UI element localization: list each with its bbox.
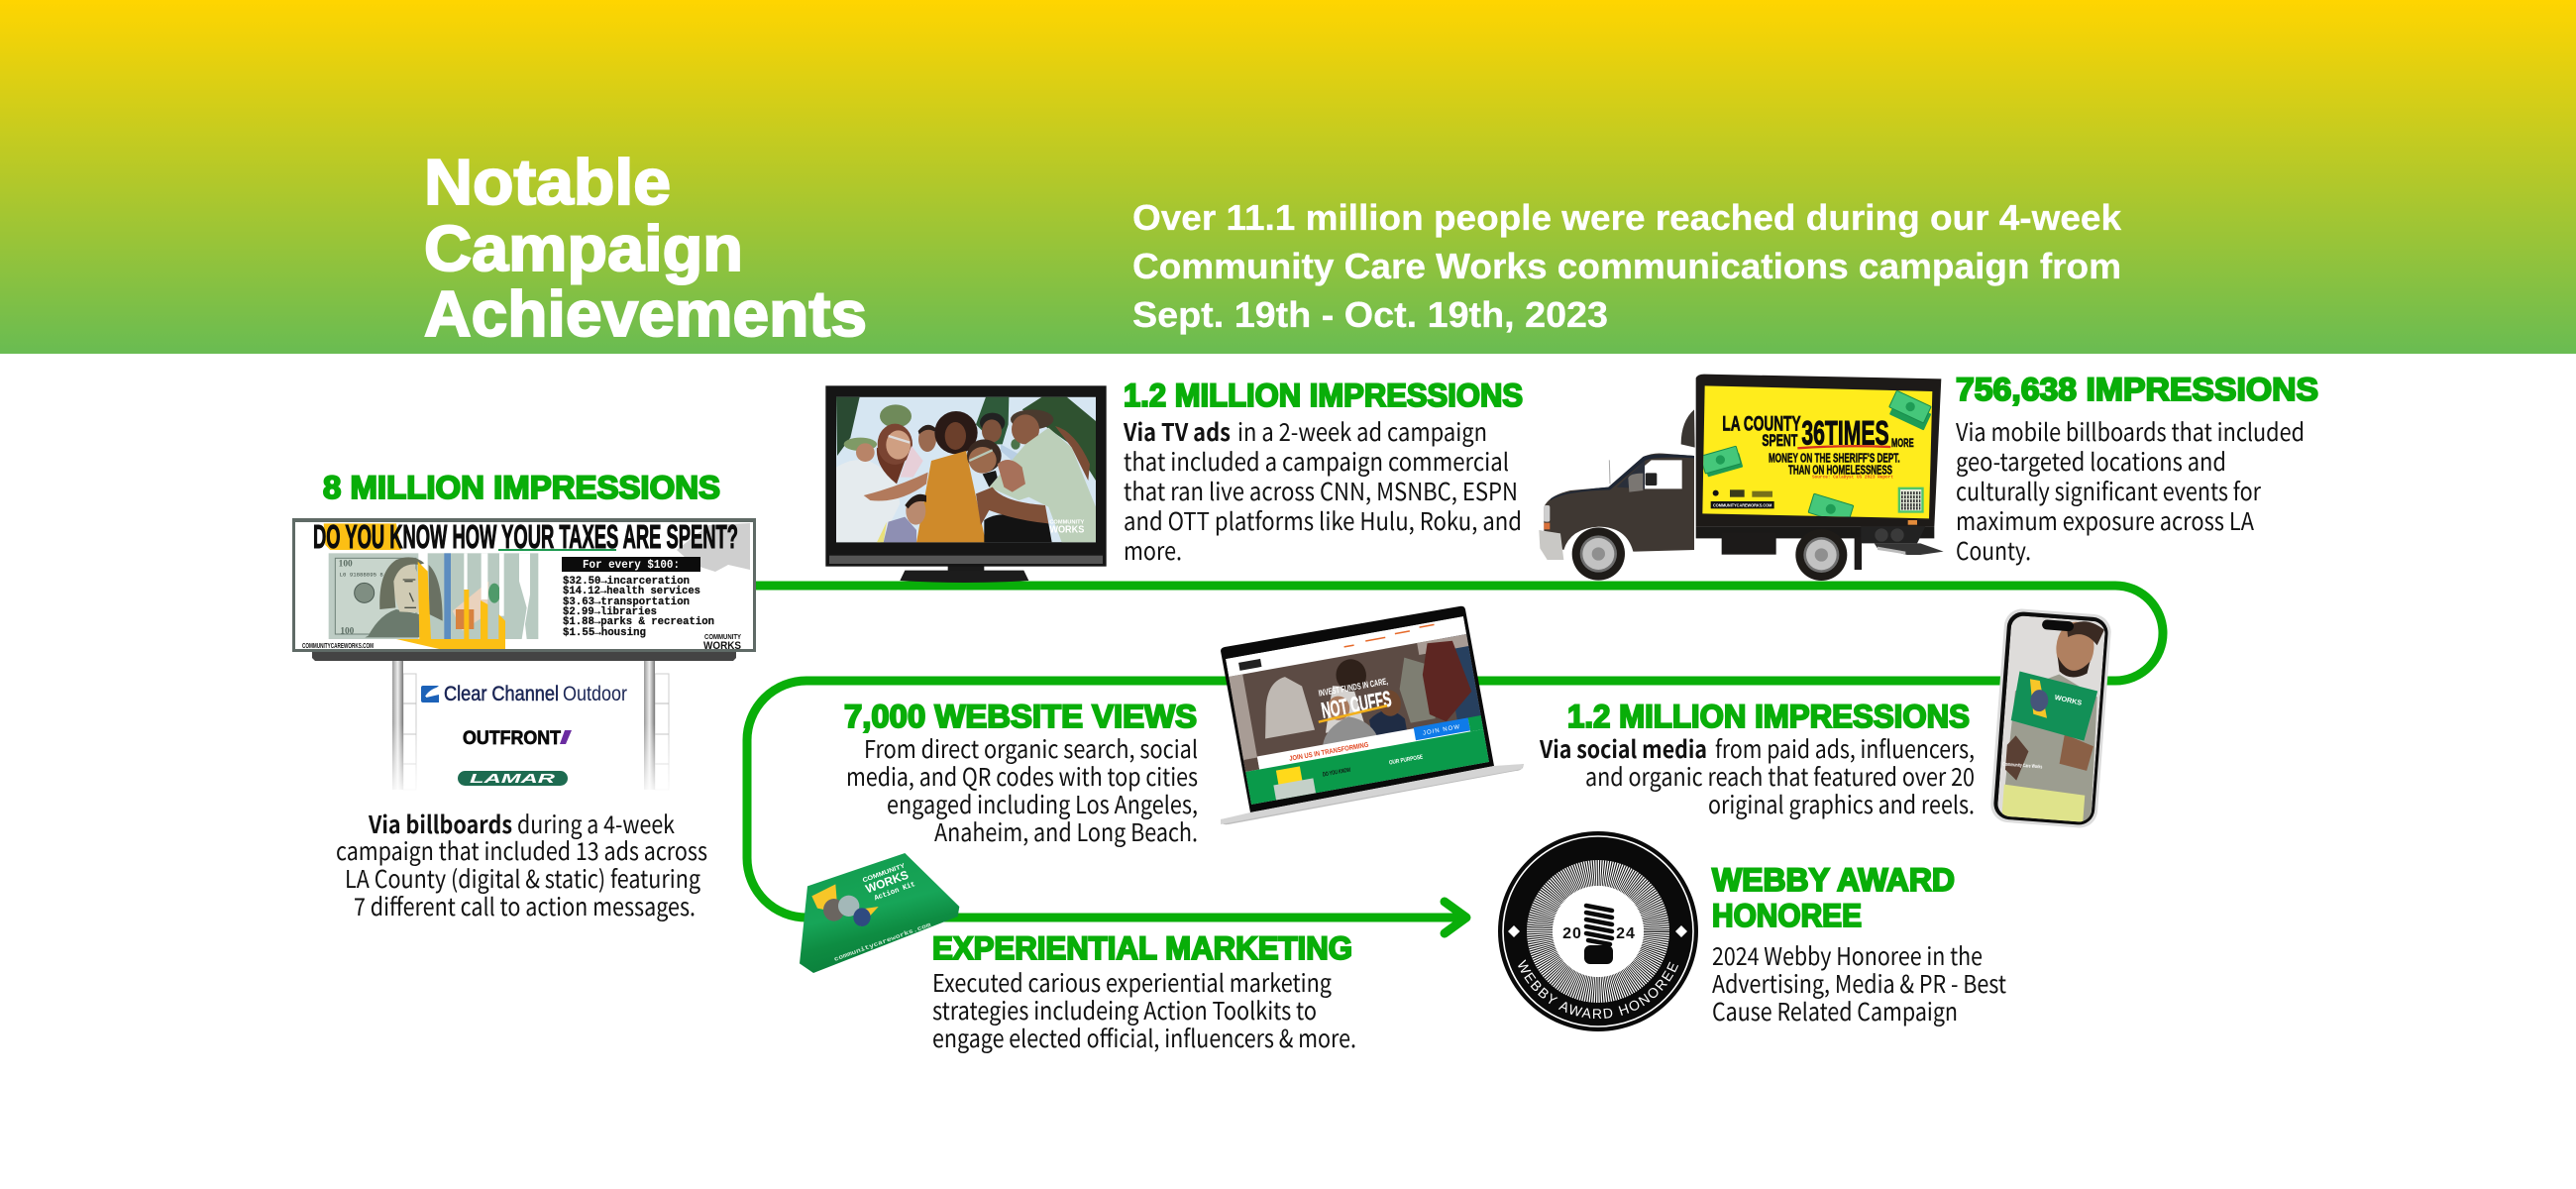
body text: social media: original graphics and reels. bbox=[1708, 787, 1975, 821]
title bbox=[424, 146, 867, 350]
billboard price list: For every $100: bbox=[583, 558, 680, 572]
body text: social media: and organic reach that featured over 20 bbox=[1585, 759, 1975, 794]
icon: television with campaign photo: WORKS bbox=[1049, 525, 1085, 536]
body text: social media: from paid ads, influencers, bbox=[1715, 731, 1975, 766]
panel: experiential marketing bbox=[800, 853, 1356, 1055]
title: Notable bbox=[424, 146, 671, 218]
heading: Webby award honoree: HONOREE bbox=[1712, 898, 1862, 933]
torn dollar bill artwork: 100 bbox=[339, 560, 353, 570]
body text: TV ads: that ran live across CNN, MSNBC, ESPN bbox=[1124, 474, 1518, 508]
vendor logo: Lamar: LAMAR bbox=[470, 771, 556, 786]
billboard price list: $3.63→transportation bbox=[563, 596, 690, 608]
body text: Webby award: Advertising, Media & PR - Best bbox=[1712, 966, 2006, 1001]
heading: 7,000 website views: 7,000 WEBSITE VIEWS bbox=[844, 699, 1197, 734]
icon: laptop showing website: OUR PURPOSE bbox=[1388, 754, 1424, 767]
icon: action toolkit box: COMMUNITY bbox=[862, 862, 907, 884]
billboard illustration: COMMUNITY bbox=[704, 634, 741, 641]
body text: TV ads: Via TV ads bbox=[1123, 414, 1231, 449]
icon: phone with influencer bbox=[1989, 607, 2112, 829]
body text: experiential marketing: engage elected official, influencers & more. bbox=[932, 1021, 1356, 1055]
heading: Webby award honoree: WEBBY AWARD bbox=[1712, 862, 1955, 898]
billboard illustration: WORKS bbox=[703, 640, 741, 652]
icon: Webby honoree badge: 20 bbox=[1562, 925, 1582, 942]
body text: mobile billboards: Via mobile billboards that included bbox=[1956, 414, 2305, 449]
body text: website views: engaged including Los Angeles, bbox=[887, 787, 1198, 821]
header band bbox=[0, 0, 2576, 354]
billboard price list bbox=[562, 557, 714, 639]
truck ad artwork bbox=[1700, 390, 1934, 524]
body text: TV ads bbox=[1123, 414, 1522, 568]
body text: experiential marketing: strategies includeing Action Toolkits to bbox=[932, 993, 1317, 1027]
body text: billboards: Via billboards bbox=[368, 807, 512, 841]
subtitle text: Over 11.1 million people were reached during our 4-week bbox=[1132, 197, 2122, 238]
truck ad artwork: LA COUNTY bbox=[1722, 411, 1801, 435]
truck ad artwork: THAN ON HOMELESSNESS bbox=[1788, 462, 1892, 477]
panel: mobile billboards bbox=[1539, 372, 2318, 581]
body text: social media bbox=[1539, 731, 1975, 821]
truck ad artwork: Source: CalaDyst US 2023 Report bbox=[1812, 475, 1893, 481]
body text: website views: Anaheim, and Long Beach. bbox=[934, 814, 1198, 849]
truck ad artwork: MONEY ON THE SHERIFF'S DEPT. bbox=[1769, 451, 1900, 466]
icon: action toolkit box: communitycareworks.com bbox=[833, 921, 932, 963]
icon: laptop showing website bbox=[1221, 606, 1524, 824]
body text: Webby award: 2024 Webby Honoree in the bbox=[1712, 938, 1983, 973]
heading: Webby award honoree bbox=[1712, 862, 1955, 933]
truck ad artwork: SPENT bbox=[1762, 431, 1797, 450]
body text: billboards: 7 different call to action messages. bbox=[354, 889, 696, 923]
body text: website views: From direct organic search, social bbox=[864, 731, 1198, 766]
icon: Webby honoree badge: 24 bbox=[1616, 925, 1636, 942]
billboard illustration bbox=[292, 518, 756, 791]
heading: 1.2 million social impressions: 1.2 MILLION IMPRESSIONS bbox=[1567, 699, 1970, 734]
panel: social media bbox=[1539, 607, 2112, 829]
icon: mobile billboard truck bbox=[1539, 375, 1944, 581]
vendor logo: Clear Channel Outdoor: Outdoor bbox=[563, 683, 627, 705]
body text: website views bbox=[846, 731, 1198, 849]
body text: mobile billboards: culturally significant events for bbox=[1956, 474, 2261, 508]
truck ad artwork: 36TIMES bbox=[1801, 414, 1889, 452]
body text: TV ads: in a 2-week ad campaign bbox=[1237, 414, 1487, 449]
icon: phone with influencer: Community Care Works bbox=[2002, 761, 2043, 770]
panel: billboards bbox=[292, 470, 756, 923]
vendor logo: Outfront: OUTFRONT bbox=[463, 728, 561, 749]
vendor logo: Clear Channel Outdoor: Clear Channel bbox=[444, 683, 559, 705]
body text: mobile billboards: County. bbox=[1956, 533, 2031, 568]
body text: Webby award: Cause Related Campaign bbox=[1712, 994, 1958, 1028]
panel: Webby award bbox=[1498, 831, 2006, 1031]
heading: 1.2 million TV impressions: 1.2 MILLION IMPRESSIONS bbox=[1124, 378, 1523, 413]
vendor logo: Lamar bbox=[458, 771, 568, 786]
icon: laptop showing website: DO YOU KNOW bbox=[1322, 767, 1351, 779]
body text: mobile billboards: geo-targeted locations and bbox=[1956, 444, 2226, 479]
billboard headline: DO YOU KNOW HOW YOUR TAXES ARE SPENT? bbox=[313, 518, 738, 555]
icon: Webby honoree badge bbox=[1498, 831, 1698, 1031]
body text: mobile billboards bbox=[1956, 414, 2305, 568]
icon: action toolkit box bbox=[800, 853, 959, 973]
body text: website views: media, and QR codes with top cities bbox=[846, 759, 1198, 794]
body text: billboards bbox=[336, 807, 707, 923]
icon: laptop showing website: INVEST FUNDS IN CARE, bbox=[1318, 676, 1389, 699]
icon: Webby honoree badge: WEBBY AWARD HONOREE bbox=[1518, 959, 1678, 1019]
torn dollar bill artwork: L0 91888895 8 bbox=[340, 572, 383, 579]
icon: television with campaign photo: COMMUNITY bbox=[1049, 519, 1085, 525]
vendor logo: Clear Channel Outdoor bbox=[421, 683, 627, 705]
torn dollar bill artwork: 100 bbox=[340, 626, 355, 636]
icon: action toolkit box: WORKS bbox=[864, 868, 911, 896]
heading: experiential marketing: EXPERIENTIAL MARKETING bbox=[932, 930, 1352, 966]
billboard price list: $1.55→housing bbox=[563, 627, 646, 639]
body text: billboards: during a 4-week bbox=[517, 807, 675, 841]
body text: TV ads: and OTT platforms like Hulu, Roku, and bbox=[1124, 503, 1522, 538]
billboard illustration: COMMUNITYCAREWORKS.COM bbox=[302, 641, 374, 650]
icon: laptop showing website: NOT CUFFS bbox=[1320, 687, 1393, 723]
body text: experiential marketing bbox=[932, 965, 1356, 1055]
body text: billboards: LA County (digital & static) featuring bbox=[345, 861, 700, 896]
heading: 756,638 impressions: 756,638 IMPRESSIONS bbox=[1956, 372, 2318, 407]
heading: 8 million impressions: 8 MILLION IMPRESSIONS bbox=[323, 470, 720, 505]
arrow: green campaign timeline path bbox=[747, 586, 2163, 933]
body text: experiential marketing: Executed carious experiential marketing bbox=[932, 965, 1332, 1000]
subtitle text: Community Care Works communications campaign from bbox=[1132, 246, 2121, 286]
panel: website views bbox=[844, 606, 1524, 849]
billboard price list: $2.99→libraries bbox=[563, 606, 657, 618]
body text: Webby award bbox=[1712, 938, 2006, 1028]
title: Campaign bbox=[424, 212, 743, 284]
truck ad artwork: MORE bbox=[1891, 436, 1914, 450]
body text: social media: Via social media bbox=[1539, 731, 1707, 766]
icon: laptop showing website: JOIN NOW bbox=[1422, 723, 1461, 737]
torn dollar bill artwork bbox=[324, 523, 538, 649]
truck ad artwork: COMMUNITYCAREWORKS.COM bbox=[1713, 502, 1771, 507]
subtitle text: Sept. 19th - Oct. 19th, 2023 bbox=[1132, 294, 1608, 335]
body text: mobile billboards: maximum exposure across LA bbox=[1956, 503, 2254, 538]
icon: action toolkit box: Action Kit bbox=[874, 881, 916, 903]
body text: TV ads: that included a campaign commercial bbox=[1124, 444, 1509, 479]
billboard price list: $14.12→health services bbox=[563, 586, 700, 597]
subtitle text bbox=[1132, 197, 2122, 335]
panel: TV ads bbox=[825, 378, 1523, 583]
body text: TV ads: more. bbox=[1124, 533, 1182, 568]
billboard price list: $32.50→incarceration bbox=[563, 576, 690, 588]
icon: television with campaign photo bbox=[825, 385, 1107, 583]
title: Achievements bbox=[424, 277, 867, 350]
icon: phone with influencer: WORKS bbox=[2054, 695, 2083, 707]
body text: billboards: campaign that included 13 ads across bbox=[336, 833, 707, 868]
billboard price list: $1.88→parks & recreation bbox=[563, 616, 714, 628]
icon: laptop showing website: JOIN US IN TRANSFORMING bbox=[1289, 741, 1369, 763]
